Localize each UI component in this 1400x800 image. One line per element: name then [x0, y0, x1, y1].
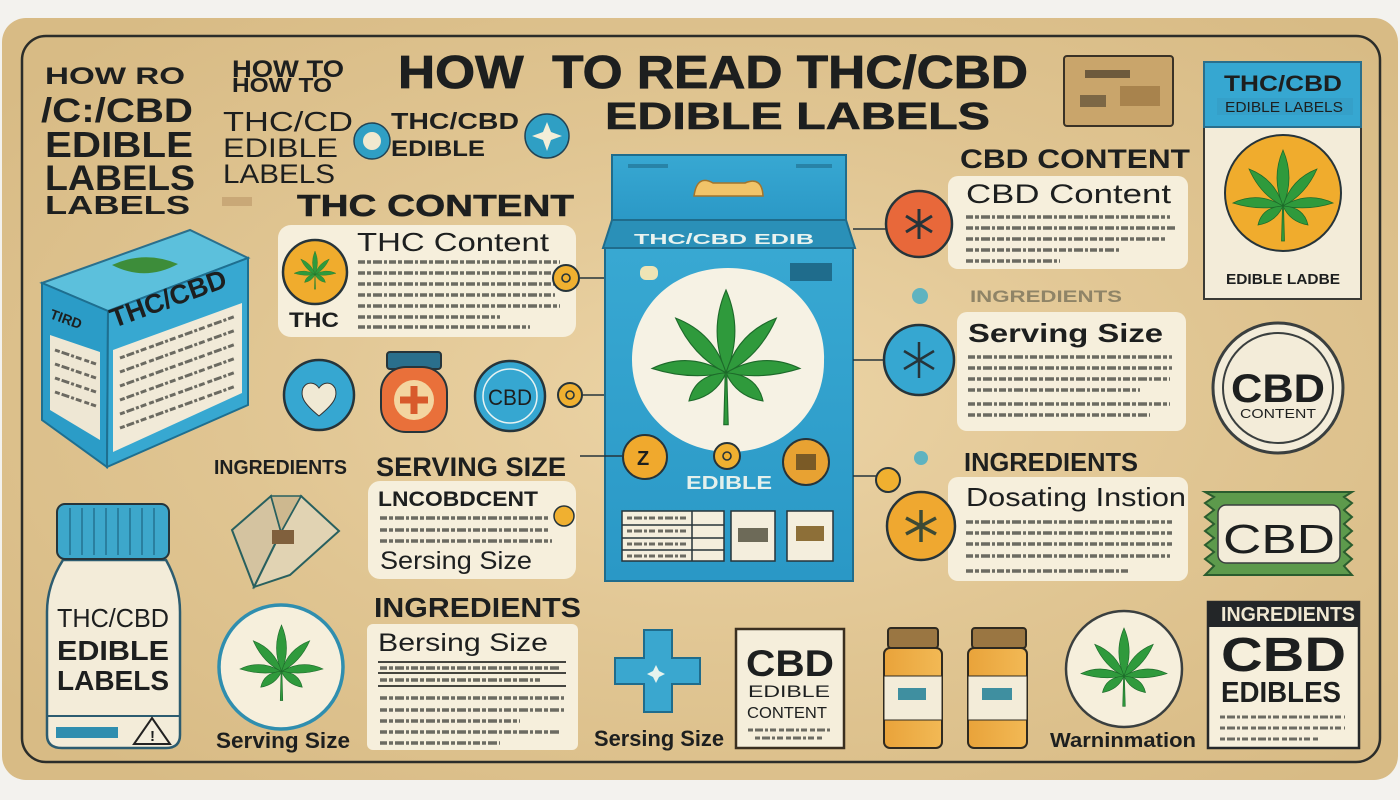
ingredients label card: INGREDIENTS — [1221, 604, 1355, 626]
left column heading: HOW RO — [45, 63, 185, 90]
section heading: THC content: THC CONTENT — [297, 188, 574, 223]
icon: amber star circle — [853, 451, 955, 560]
label: ingredients right: INGREDIENTS — [964, 447, 1138, 477]
icon: leaf badge — [219, 605, 343, 729]
left column heading: EDIBLE — [45, 124, 193, 165]
connector: THC — [553, 265, 612, 291]
package leaf — [652, 290, 800, 425]
small icon row with THC/CBD edible: EDIBLE — [391, 136, 485, 161]
icon: green CBD packet: CBD — [1223, 516, 1335, 562]
panel: serving size — [368, 481, 576, 579]
label: sersing size: Sersing Size — [594, 726, 724, 751]
second heading — [222, 56, 353, 206]
top right label card: EDIBLE LABELS — [1225, 99, 1343, 116]
icon: CBD circle: CBD — [488, 385, 532, 410]
icon: orange jar — [381, 352, 447, 432]
CBD content label card: CONTENT — [747, 705, 827, 722]
icon: amber jar right — [968, 628, 1027, 748]
left column heading: /C:/CBD — [41, 92, 193, 130]
isometric box: TIRD — [48, 306, 84, 332]
top right label card — [1204, 62, 1361, 299]
left column heading: LABELS — [45, 159, 195, 198]
badge: CBD content: CONTENT — [1240, 406, 1316, 421]
small icon row with THC/CBD edible: THC/CBD — [391, 108, 519, 134]
bottle: ! — [150, 728, 155, 745]
title: EDIBLE LABELS — [605, 96, 990, 138]
second heading: HOW TO — [232, 75, 332, 97]
package small icons: Z — [637, 448, 649, 470]
main package: EDIBLE — [686, 473, 772, 493]
icon: blue heart circle — [284, 360, 354, 430]
package band text: THC/CBD EDIB — [634, 231, 814, 248]
icon: folded packet — [232, 496, 339, 587]
second heading: EDIBLE — [223, 133, 338, 163]
panel: serving size right: Serving Size — [968, 318, 1163, 348]
isometric box — [42, 230, 248, 467]
section heading: ingredients: INGREDIENTS — [374, 592, 581, 623]
left column heading: LABELS — [45, 190, 190, 220]
CBD content label card — [736, 629, 844, 748]
label: ingredients small: INGREDIENTS — [214, 457, 347, 479]
bottle: THC/CBD — [57, 603, 169, 633]
second heading: HOW TO — [232, 56, 344, 83]
panel: dosage instructions: Dosating Instion — [966, 482, 1186, 512]
panel: CBD content: CBD Content — [966, 179, 1172, 209]
panel: serving size right — [957, 312, 1186, 431]
badge: CBD content — [1213, 323, 1343, 453]
ingredients label card — [1208, 602, 1359, 748]
icon: blue star circle — [853, 325, 954, 395]
label: warning information: Warninmation — [1050, 730, 1196, 752]
bottle: LABELS — [57, 665, 169, 696]
top right label card: EDIBLE LADBE — [1226, 271, 1340, 288]
label: serving size: Serving Size — [216, 728, 350, 753]
main package — [603, 155, 855, 581]
second heading: LABELS — [223, 159, 335, 189]
panel: THC content — [278, 225, 576, 337]
label: ingredients faded: INGREDIENTS — [970, 287, 1122, 306]
top right label card: THC/CBD — [1224, 71, 1342, 96]
icon: green CBD packet — [1205, 492, 1352, 575]
second heading: THC/CD — [223, 106, 353, 137]
ingredients label card: EDIBLES — [1221, 677, 1341, 709]
icon: blue cross — [615, 630, 700, 712]
bottle — [47, 504, 180, 748]
label: ingredients faded — [912, 287, 1122, 306]
icon: orange star circle — [853, 191, 952, 257]
panel: THC content: THC Content — [357, 227, 550, 257]
package small icons — [623, 263, 832, 485]
package nutrition table — [622, 511, 833, 561]
isometric box: THC/CBD — [106, 264, 231, 334]
title — [398, 46, 1028, 138]
connector: left package icon — [580, 455, 622, 457]
ingredients label card: CBD — [1221, 629, 1346, 682]
panel: serving size: LNCOBDCENT — [378, 488, 538, 511]
icon: amber jar left — [884, 628, 942, 748]
stamp icon — [1064, 56, 1173, 126]
CBD content label card: EDIBLE — [748, 682, 830, 701]
icon: CBD circle — [475, 361, 545, 431]
section heading: CBD content: CBD CONTENT — [960, 144, 1191, 174]
badge: CBD content: CBD — [1231, 367, 1325, 411]
package white blob — [632, 268, 824, 452]
icon: leaf circle — [1066, 611, 1182, 727]
left column heading — [41, 63, 195, 220]
bottle: EDIBLE — [57, 635, 169, 666]
title: HOW TO READ THC/CBD — [398, 46, 1028, 98]
panel: serving size table: Bersing Size — [378, 629, 548, 657]
connector: CBD — [558, 383, 608, 407]
small icon row with THC/CBD edible — [354, 108, 569, 161]
panel: THC content: THC — [289, 309, 339, 332]
section heading: serving size: SERVING SIZE — [376, 452, 566, 482]
panel: serving size table — [367, 624, 578, 750]
panel: CBD content — [948, 176, 1188, 269]
panel: serving size: Sersing Size — [380, 547, 532, 575]
CBD content label card: CBD — [746, 643, 834, 684]
panel: dosage instructions — [948, 477, 1188, 581]
